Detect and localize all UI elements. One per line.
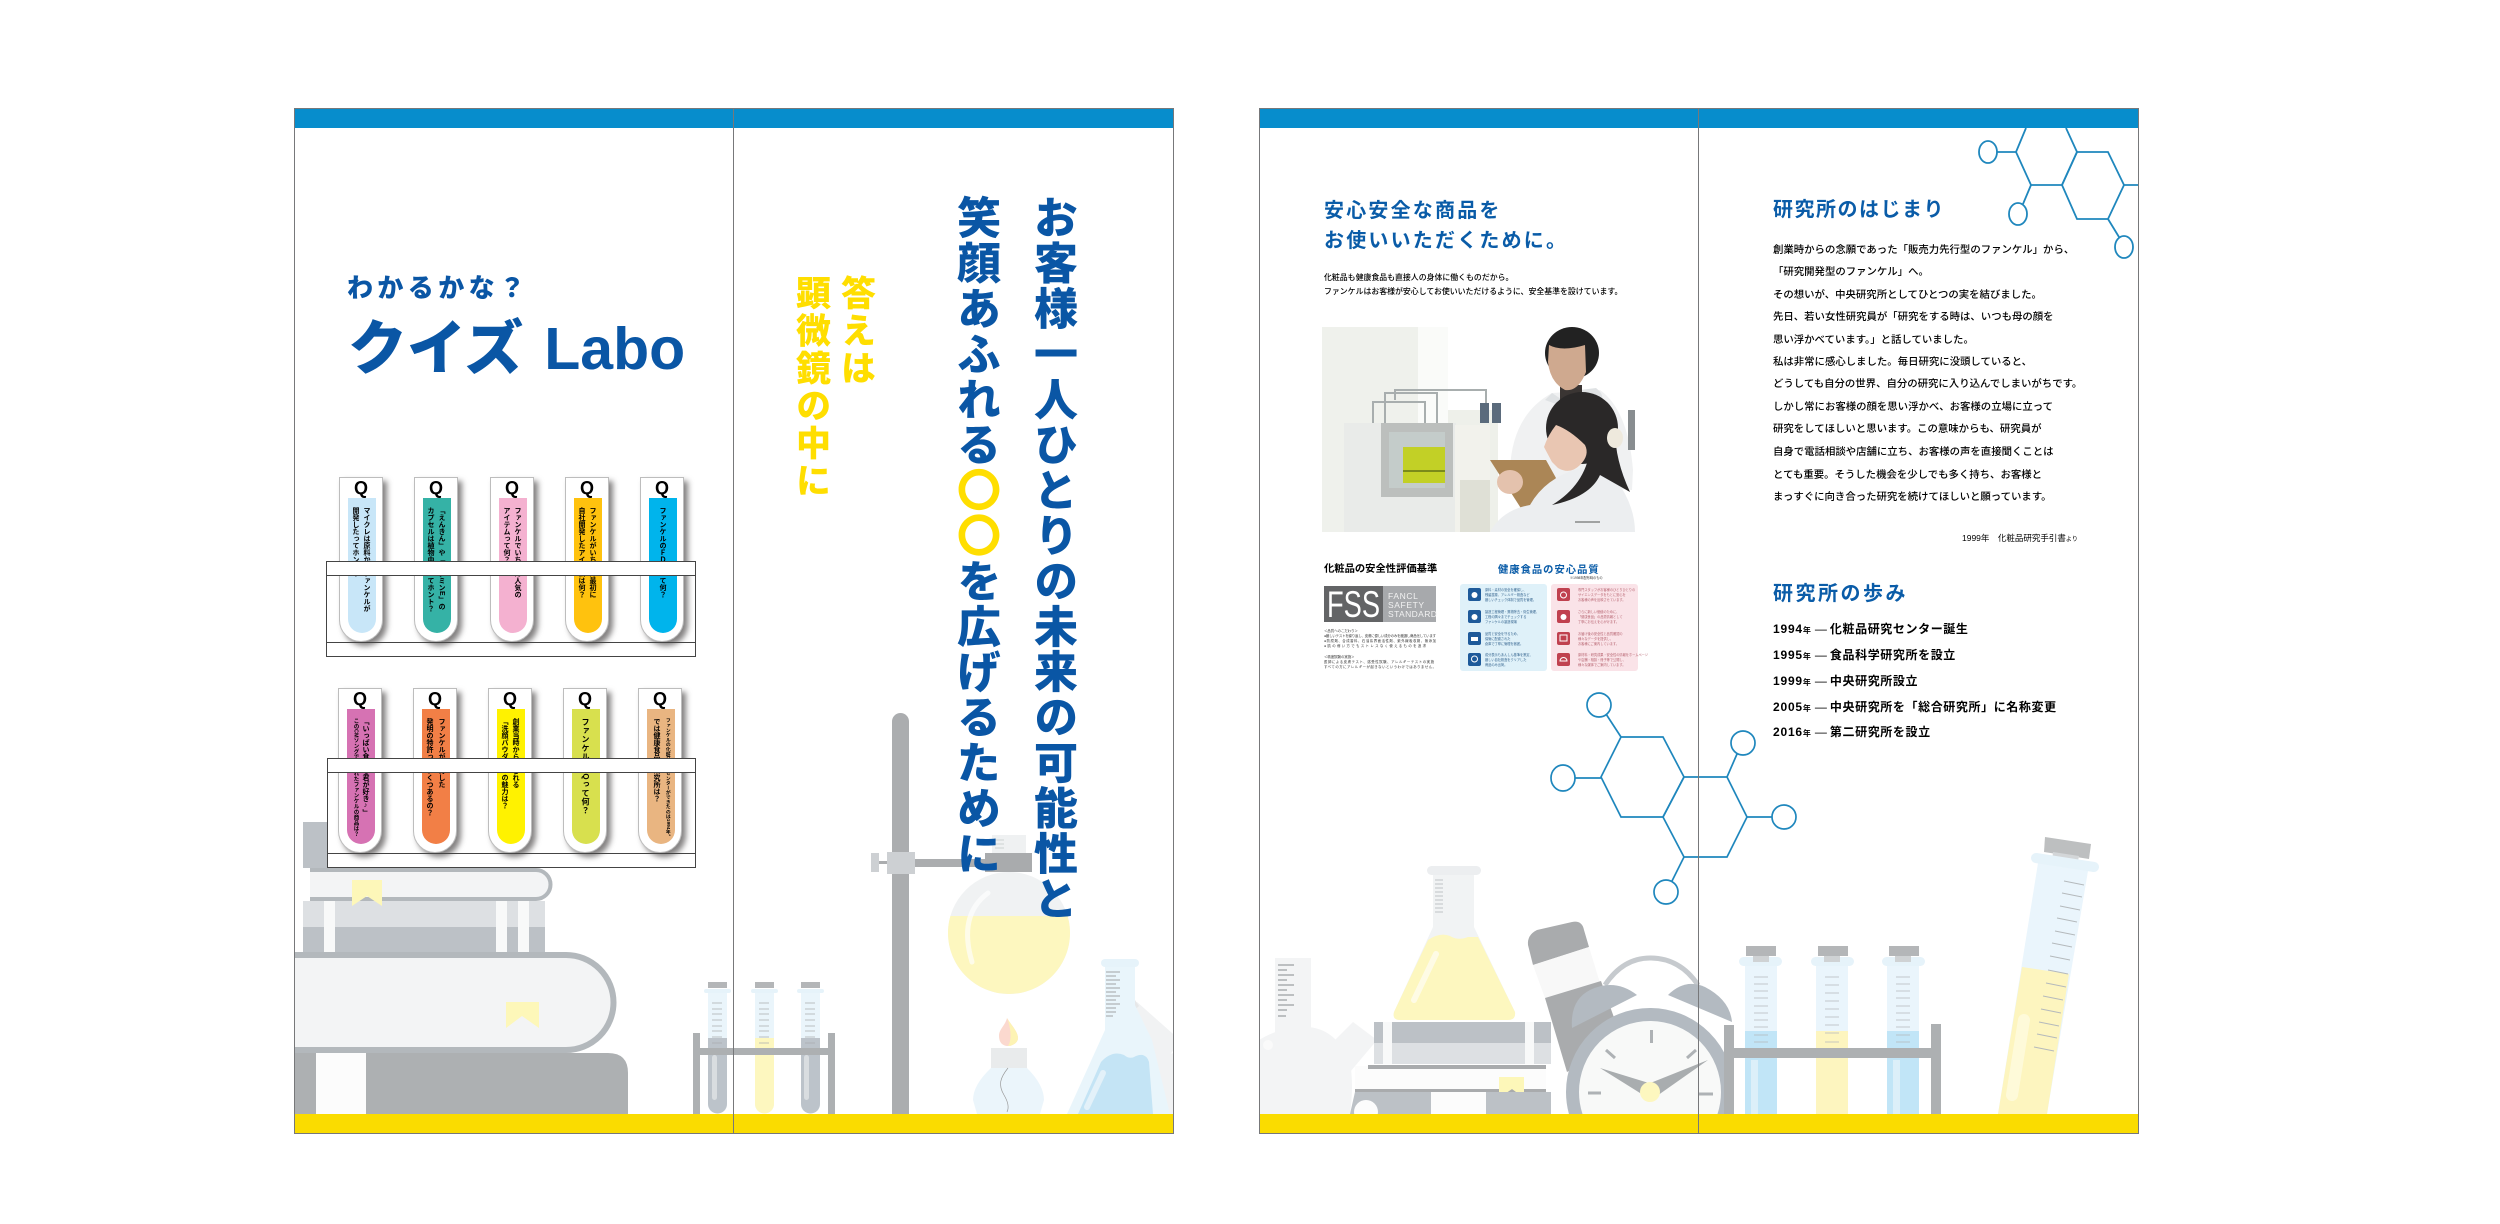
text block: lab origin story: 研究をしてほしいと思います。この意味からも、研究員が <box>1773 424 2042 435</box>
quiz tubes, upper row <box>338 476 692 650</box>
panel: health food quality, pink: 原材料・研究成果・安全性の情報をホームページ <box>1578 652 1648 657</box>
text block: FSS small print: ●厳しいテストを繰り返し、皮膚に優しい成分のみを厳選し商品化しています <box>1324 633 1437 638</box>
panel: health food quality, blue: 倉庫で丁寧に管理を徹底。 <box>1485 641 1523 646</box>
tube: question 2 <box>414 477 458 642</box>
quiz tubes, lower row <box>338 688 690 861</box>
panel: health food quality, blue: ファンケルの製造現場 <box>1485 619 1518 624</box>
panel: health food quality, blue: 厳しいチェック体制で品質を管理。 <box>1485 597 1536 602</box>
illustration: FSS logo: FSS <box>1327 584 1380 625</box>
text block: lab origin story: 「研究開発型のファンケル」へ。 <box>1773 267 1929 278</box>
tube: question 4: ファンケルがいちばん最初に <box>589 507 596 598</box>
heading: quiz eyebrow: わかるかな？ <box>347 273 529 303</box>
illustration: alarm clock <box>1566 956 1732 1114</box>
tube: question 6: Q <box>353 689 367 709</box>
timeline: lab history: 1995年 —食品科学研究所を設立 <box>1773 648 1956 662</box>
panel: health food quality, blue: 工程の隅々までチェックする <box>1485 614 1526 619</box>
heading: main message, second column: 笑顔あふれる 〇〇 を広げるために <box>950 195 999 876</box>
panel: health food quality, pink: さらに新しい価値のために、 <box>1578 609 1619 614</box>
tube: question 5 <box>640 477 684 642</box>
text block: safety intro: 化粧品も健康食品も直接人の身体に働くものだから。 <box>1324 273 1513 282</box>
tube: question 8: 創業当時から愛される <box>512 718 519 788</box>
text block: FSS small print: ●肌の弱い方でもストレスなく使えるものを追求 <box>1324 643 1427 648</box>
text block: safety intro <box>1324 273 1622 296</box>
illustration: molecule, lower right spread <box>1551 693 1796 904</box>
tube: question 2: Q <box>429 478 443 498</box>
tube: question 1: 開発したってホント？ <box>352 507 359 577</box>
text block: FSS small print: ＜精度試験の実施＞ <box>1324 654 1355 659</box>
text block: lab origin story: しかし常にお客様の顔を思い浮かべ、お客様の立場に立って <box>1773 402 2053 413</box>
panel: health food quality, blue: 原料・素材の安全を確保し、 <box>1485 587 1526 592</box>
tube: question 2: カプセルは植物由来ってホント？ <box>427 507 434 612</box>
tube: question 10: ファンケルの化粧品研究センターができたのは1994年。 <box>665 718 670 839</box>
text block: lab origin story: とても重要。そうした機会を少しでも多く持ち、お客様と <box>1773 470 2042 481</box>
panel: health food quality, pink: 丁寧にお伝えを心がけます。 <box>1578 619 1619 624</box>
tube: question 2: 「えんきん」や「ビタミンE」の <box>438 507 445 610</box>
tube: question 1: Q <box>354 478 368 498</box>
tube: question 1: マイクレは原料からファンケルが <box>363 507 370 612</box>
rack: upper test tube holder <box>326 561 696 657</box>
illustration: microscope <box>1528 922 1622 1072</box>
heading: lab history: 研究所の歩み <box>1773 583 1908 605</box>
panel: health food quality, pink: お届け後の安全性と品質確認の <box>1578 631 1623 636</box>
panel: health food quality, pink: 様々な媒体でご案内しています。 <box>1578 662 1625 667</box>
heading: safety <box>1324 200 1568 252</box>
illustration: FSS logo <box>1324 584 1437 625</box>
panel: health food quality, blue: 厳しい自社検査をクリアした <box>1485 657 1526 662</box>
tube: question 5: Q <box>655 478 669 498</box>
text block: lab origin story: 自身で電話相談や店舗に立ち、お客様の声を直接聞くことは <box>1773 447 2054 458</box>
illustration: FSS logo: SAFETY <box>1388 600 1425 610</box>
tube: question 3: アイテムって何？ <box>503 507 510 563</box>
heading: quiz title: クイズ Labo <box>348 316 685 382</box>
tube: question 5: ファンケルのＦＤＲって何？ <box>659 507 666 598</box>
tube: question 1 <box>339 477 383 642</box>
panel: health food quality, blue: 保管に配慮された <box>1485 636 1510 641</box>
panel: health food quality, pink: 様々なデータを提供し、 <box>1578 636 1613 641</box>
panel: health food quality, pink <box>1551 584 1648 671</box>
panel: health food quality, pink: お客様の声を反映させています。 <box>1578 597 1626 602</box>
text block: FSS small print: 医師による皮膚テスト、感受性試験、アレルギーテストの実施 <box>1324 659 1435 664</box>
illustration: FSS logo: STANDARD <box>1388 609 1437 619</box>
heading: main message, first column: お客様一人ひとりの未来の可能性と <box>1027 195 1076 921</box>
text block: lab origin story: 先日、若い女性研究員が「研究をする時は、いつも母の顔を <box>1773 312 2054 323</box>
illustration: tilted test tube <box>1998 837 2094 1114</box>
tube: question 10 <box>638 688 682 853</box>
heading: answer hint, first column: 答えは <box>836 275 875 388</box>
note: health food quality caption: ※1998年配布時のもの <box>1570 576 1603 580</box>
text block: lab origin story: まっすぐに向き合った研究を続けてほしいと願っています。 <box>1773 492 2052 503</box>
panel: health food quality, pink: や店舗・相談・冊子等で公開し、 <box>1578 657 1626 662</box>
panel: health food quality, blue: 商品のみ出荷。 <box>1485 662 1507 667</box>
tube: question 9: ファンケルHSQって何？ <box>581 718 590 815</box>
panel: health food quality, blue: 成分表示もあんしん基準を策定、 <box>1485 652 1533 657</box>
tube: question 3 <box>490 477 534 642</box>
tube: question 9 <box>563 688 607 853</box>
text block: lab origin story <box>1773 244 2082 503</box>
text block: source: 1999年 化粧品研究手引書より <box>1962 533 2078 543</box>
tube: question 4: Q <box>580 478 594 498</box>
text block: FSS small print: ●防腐剤、合成香料、石油系界面活性剤、紫外線吸収剤、無添加 <box>1324 638 1437 643</box>
panel: health food quality, pink: 「健康食品」の品質情報として <box>1578 614 1623 619</box>
heading: safety: お使いいただくために。 <box>1324 230 1568 252</box>
text block: FSS small print <box>1324 628 1437 669</box>
text block: FSS small print: ＜品質へのこだわり＞ <box>1324 628 1359 633</box>
rack: lower test tube holder <box>327 758 696 868</box>
illustration: books under flask <box>1350 1022 1551 1124</box>
tube: question 7: ファンケルが取得した <box>438 718 445 788</box>
tube: question 7 <box>413 688 457 853</box>
panel: health food quality, pink: お客様にご案内しています。 <box>1578 641 1619 646</box>
text block: FSS small print: すべての方にアレルギーが起きないというわけではありません。 <box>1324 664 1436 669</box>
panel: right spread header bar <box>1259 108 2138 128</box>
panel: health food quality, blue <box>1460 584 1547 671</box>
panel: health food quality, pink: サイエンスデータをもとに安心を <box>1578 592 1626 597</box>
heading: cosmetics safety standard: 化粧品の安全性評価基準 <box>1324 564 1437 575</box>
heading: answer hint, second column: 顕微鏡の中に <box>791 275 830 500</box>
tube: question 10: では健康食品の研究所は？ <box>653 718 660 802</box>
illustration: yellow conical flask <box>1394 866 1515 1020</box>
illustration: molecule, upper right corner <box>1979 128 2138 258</box>
tube: question 8 <box>488 688 532 853</box>
panel: health food quality, blue: 品質と安全を守るため、 <box>1485 631 1520 636</box>
tube: question 3: Q <box>505 478 519 498</box>
timeline: lab history: 1999年 —中央研究所設立 <box>1773 674 1918 688</box>
timeline: lab history: 1994年 —化粧品研究センター誕生 <box>1773 622 1969 636</box>
panel: health food quality, pink: 専門スタッフがお客様のひとりひとりの <box>1578 587 1635 592</box>
heading: health food quality: 健康食品の安心品質 <box>1498 565 1600 576</box>
photo: two researchers in the lab <box>1322 327 1635 532</box>
tube: question 3: ファンケルでいちばん人気の <box>514 507 521 598</box>
tube: question 9: Q <box>578 689 592 709</box>
tube: question 6: 「いっぱい食べる君が好き♪」 <box>362 718 369 816</box>
text block: safety intro: ファンケルはお客様が安心してお使いいただけるように、安全基準を設けています。 <box>1324 287 1622 296</box>
illustrations and panel frames <box>294 108 2139 1134</box>
illustration: round flask, right spread <box>1259 958 1377 1114</box>
tube: question 7: 発明の特許っていくつあるの？ <box>426 718 433 816</box>
text block: lab origin story: その想いが、中央研究所としてひとつの実を結びました。 <box>1773 290 2042 301</box>
footer bars <box>294 1114 2138 1134</box>
heading: safety: 安心安全な商品を <box>1324 200 1502 222</box>
tube: question 4 <box>565 477 609 642</box>
tube: question 7: Q <box>428 689 442 709</box>
tube: question 10: Q <box>653 689 667 709</box>
heading: lab origin: 研究所のはじまり <box>1773 199 1945 221</box>
panel: left spread header bar <box>294 108 1173 128</box>
panel: health food quality, blue: 製造工程管理・異物除去・衛生管理、 <box>1485 609 1539 614</box>
illustration: FSS logo: FANCL <box>1388 591 1418 601</box>
text block: lab origin story: 思い浮かべています。」と話していました。 <box>1773 335 1974 346</box>
panel: health food quality, blue: 残留農薬、アレルギー検査など <box>1485 592 1530 597</box>
tube: question 6 <box>338 688 382 853</box>
illustration: alcohol lamp <box>973 1018 1044 1114</box>
text block: lab origin story: どうしても自分の世界、自分の研究に入り込んでしまいがちです。 <box>1773 379 2082 390</box>
illustration: stack of books <box>288 822 628 1114</box>
tube: question 6: このCMソングで知られたファンケルの商品は？ <box>352 718 358 837</box>
illustration: conical flask and rear flask <box>1067 959 1173 1114</box>
timeline: lab history: 2005年 —中央研究所を「総合研究所」に名称変更 <box>1773 700 2057 714</box>
illustration: retort stand and round flask <box>871 713 1070 1114</box>
panel frames and fold lines <box>294 108 2138 1134</box>
text block: lab origin story: 私は非常に感心しました。毎日研究に没頭していると、 <box>1773 357 2032 368</box>
tube: question 4: 自社開発したアイテムは何？ <box>578 507 585 598</box>
tube: question 8: 「洗顔パウダー」の魅力は？ <box>501 718 508 809</box>
timeline: lab history <box>1773 622 2057 739</box>
text block: lab origin story: 創業時からの念願であった「販売力先行型のファンケル」から、 <box>1773 245 2074 256</box>
illustration: test tube rack, right spread <box>1724 946 1941 1114</box>
tube: question 8: Q <box>503 689 517 709</box>
illustration: test tube rack, left spread <box>693 982 835 1114</box>
timeline: lab history: 2016年 —第二研究所を設立 <box>1773 725 1931 739</box>
